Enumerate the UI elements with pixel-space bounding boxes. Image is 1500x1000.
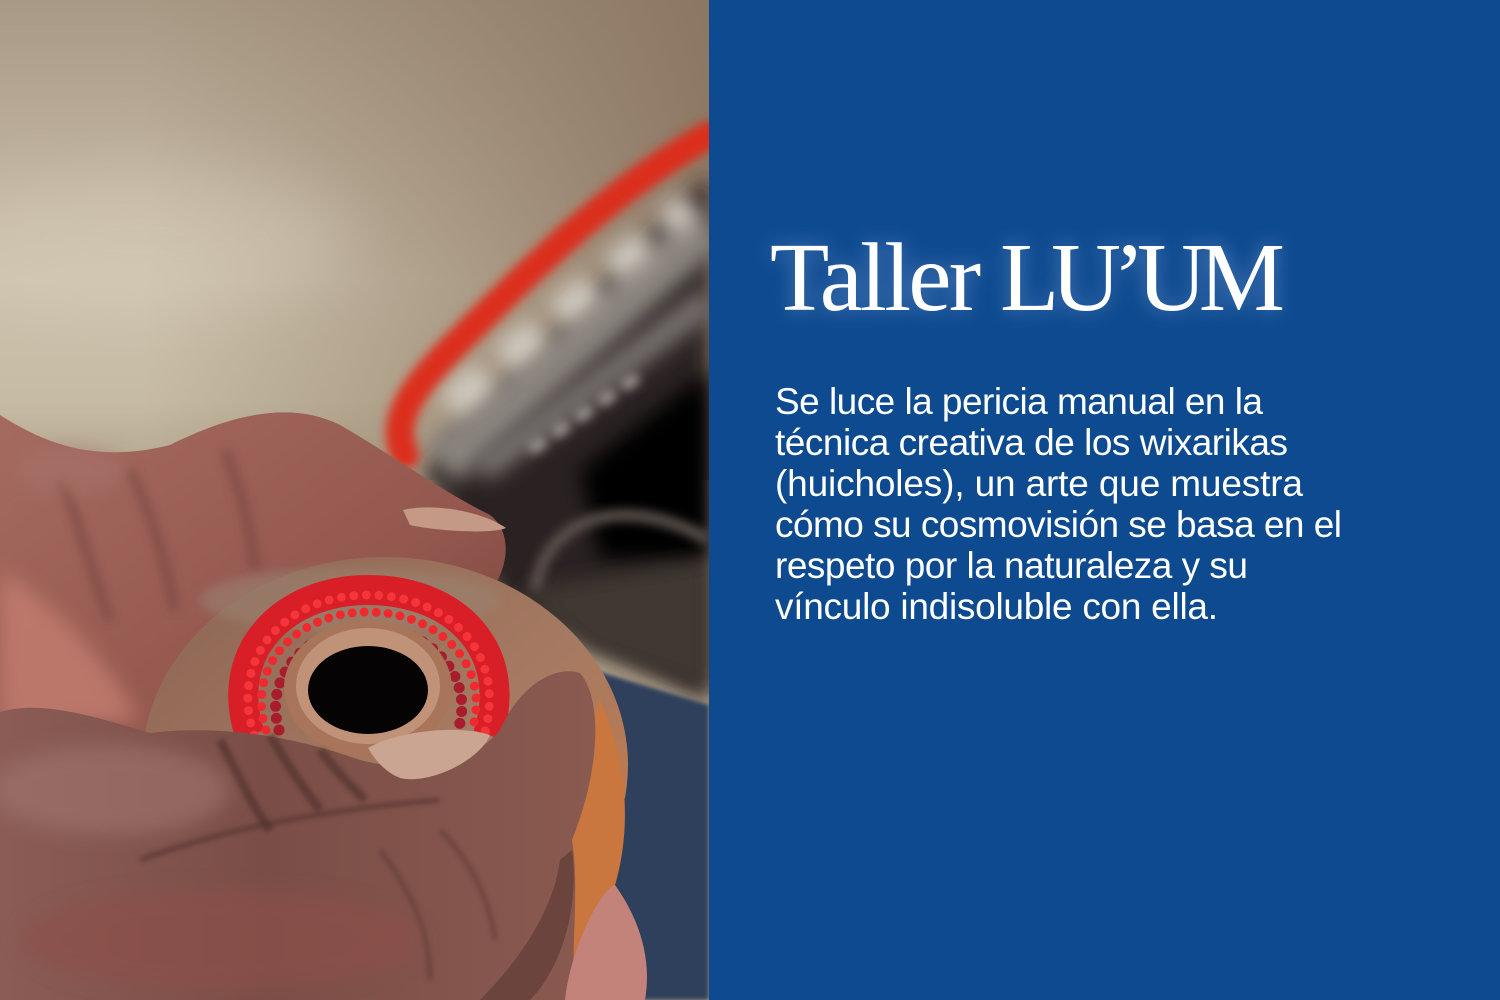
photo background wall	[0, 0, 709, 1000]
upper hand	[0, 412, 506, 780]
text block: description: vínculo indisoluble con ella.	[775, 586, 1218, 627]
text block: description: técnica creativa de los wixarikas	[775, 422, 1288, 463]
photo: hands holding a beaded gourd	[0, 0, 709, 1000]
dark textile bag	[425, 175, 709, 700]
red textile border	[400, 135, 709, 455]
lower hand	[0, 671, 647, 1000]
thumbnail upper	[403, 507, 506, 531]
title	[770, 224, 1286, 331]
text block: description: cómo su cosmovisión se basa en el	[775, 504, 1342, 545]
text block: description	[775, 381, 1342, 627]
panel: blue background	[709, 0, 1500, 1000]
title: LU’UM	[1000, 224, 1285, 331]
title: Taller	[770, 224, 981, 331]
text block: description: (huicholes), un arte que muestra	[775, 463, 1303, 504]
gourd	[142, 557, 628, 973]
thumbnail lower	[368, 730, 490, 779]
gourd opening with red beads	[243, 590, 495, 756]
finger bottom right	[565, 885, 647, 1000]
text block: description: respeto por la naturaleza y su	[775, 545, 1248, 586]
text block: description: Se luce la pericia manual en la	[775, 381, 1263, 422]
denim fabric	[560, 660, 709, 1000]
